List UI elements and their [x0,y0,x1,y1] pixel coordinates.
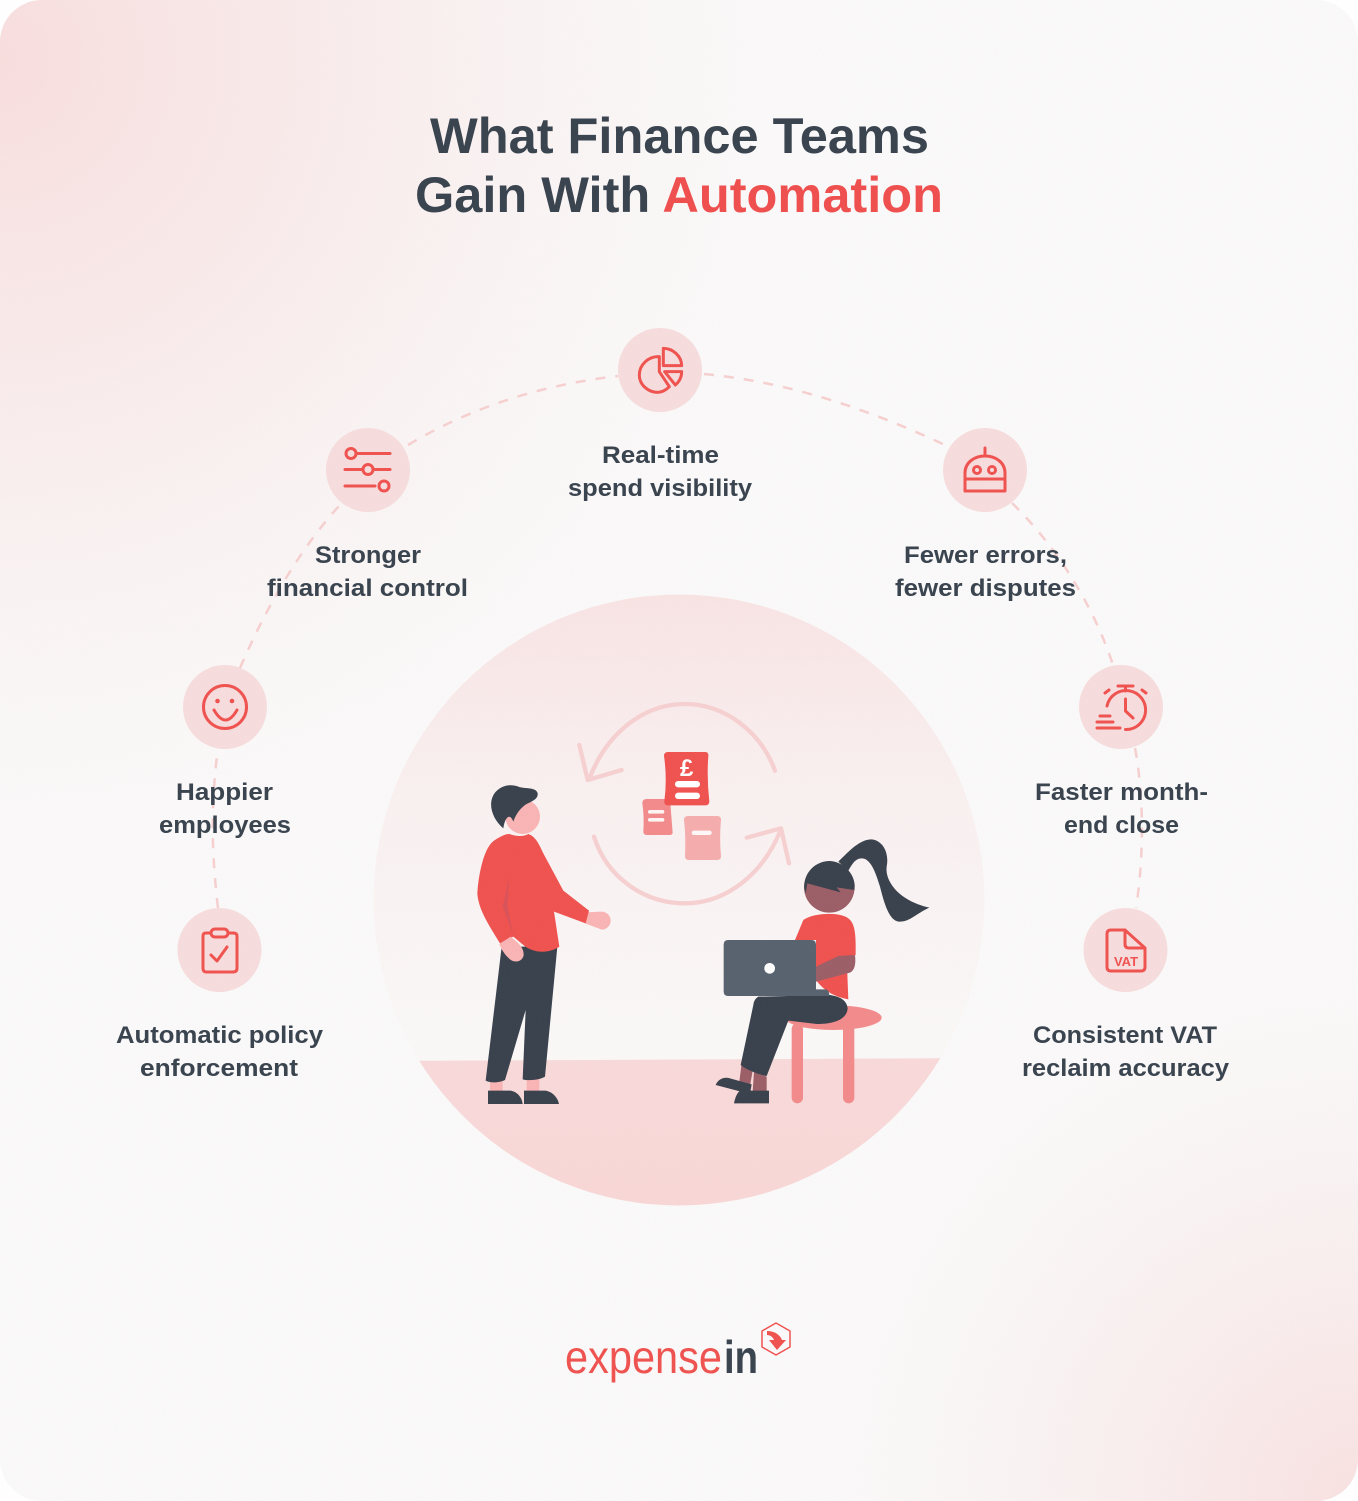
benefit: automatic policy enforcement [116,908,323,1082]
label: enforcement [140,1055,298,1082]
icon: clipboard [178,908,262,992]
title [415,108,943,223]
label [267,542,468,602]
label: Automatic policy [116,1022,323,1049]
floor [420,1058,940,1206]
label: financial control [267,575,468,602]
label [568,442,752,502]
expensein logo: expense [565,1331,722,1383]
benefit: stronger financial control [267,428,468,602]
benefit: happier employees [159,665,291,839]
label: end close [1064,812,1179,839]
label [895,542,1076,602]
label: Fewer errors, [904,542,1067,569]
label [1035,779,1208,839]
label: fewer disputes [895,575,1076,602]
label: employees [159,812,291,839]
expensein logo: in [724,1331,758,1383]
label: reclaim accuracy [1022,1055,1229,1082]
documents: £ [680,755,694,782]
benefit: faster month-end close [1035,665,1208,839]
woman figure with laptop on stool [716,839,929,1103]
label: Faster month- [1035,779,1208,806]
icon: logo hexagon [762,1323,790,1355]
title: Gain With Automation [415,167,943,223]
central illustration disc [374,594,1000,1210]
expensein logo [565,1323,790,1383]
icon: VAT document: VAT [1114,954,1138,969]
benefit: consistent VAT reclaim accuracy [1022,908,1229,1082]
icon: VAT document [1084,908,1168,992]
icon: robot [943,428,1027,512]
icon: stopwatch [1079,665,1163,749]
icon: pie chart [618,328,702,412]
icon: smiley [183,665,267,749]
benefit: real-time spend visibility [568,328,752,502]
label [159,779,291,839]
label: Real-time [602,442,719,469]
title: What Finance Teams [430,108,929,164]
icon: sliders [326,428,410,512]
label: Happier [176,779,273,806]
man figure [477,785,611,1104]
cycle arrows [579,704,789,903]
label: Stronger [315,542,421,569]
label [1022,1022,1229,1082]
label: Consistent VAT [1033,1022,1217,1049]
label [116,1022,323,1082]
documents [642,752,721,860]
label: spend visibility [568,475,752,502]
benefit: fewer errors [895,428,1076,602]
